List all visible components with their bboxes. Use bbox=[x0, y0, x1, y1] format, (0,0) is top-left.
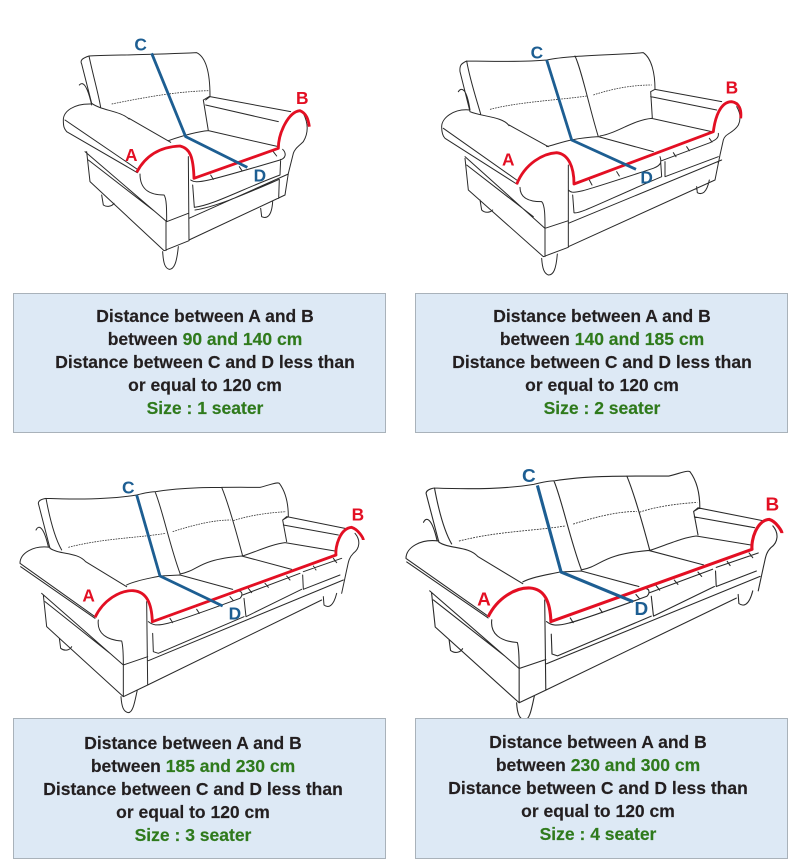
text box: 1 seater: between 90 and 140 cm bbox=[108, 329, 302, 349]
A-B measure line bbox=[517, 102, 741, 184]
labels A B C D: C bbox=[134, 35, 147, 55]
text box: 4 seater: Size : 4 seater bbox=[540, 824, 656, 844]
text box: 3 seater: or equal to 120 cm bbox=[116, 802, 270, 822]
text box: 3 seater: Size : 3 seater bbox=[135, 825, 251, 845]
sofa: 4 seater bbox=[406, 465, 782, 720]
text box: 1 seater: Size : 1 seater bbox=[147, 398, 263, 418]
text box: 4 seater: between 230 and 300 cm bbox=[496, 755, 700, 775]
text box: 2 seater: Size : 2 seater bbox=[544, 398, 660, 418]
text box: 2 seater: between 140 and 185 cm bbox=[500, 329, 704, 349]
text box: 4 seater: or equal to 120 cm bbox=[521, 801, 675, 821]
labels A B C D: B bbox=[296, 88, 309, 108]
sofa: 3 seater bbox=[20, 477, 364, 713]
text box: 4 seater: Distance between A and B bbox=[489, 732, 707, 752]
labels A B C D: D bbox=[254, 166, 266, 186]
sofa: 1 seater bbox=[63, 35, 309, 269]
labels A B C D: C bbox=[531, 43, 544, 63]
labels A B C D bbox=[477, 465, 779, 619]
labels A B C D bbox=[502, 43, 738, 187]
labels A B C D bbox=[82, 477, 364, 624]
text box: 2 seater: Distance between C and D less than bbox=[452, 352, 752, 372]
text box: 1 seater bbox=[13, 293, 386, 433]
labels A B C D: B bbox=[766, 494, 779, 515]
C-D measure line bbox=[152, 53, 247, 167]
labels A B C D: B bbox=[352, 505, 364, 525]
text box: 1 seater: Distance between C and D less than bbox=[55, 352, 355, 372]
labels A B C D: A bbox=[82, 585, 95, 605]
labels A B C D: C bbox=[522, 465, 536, 486]
text box: 4 seater bbox=[415, 718, 788, 859]
labels A B C D: A bbox=[502, 150, 515, 170]
C-D measure line bbox=[537, 485, 633, 602]
text box: 2 seater: or equal to 120 cm bbox=[525, 375, 679, 395]
text box: 3 seater: Distance between C and D less than bbox=[43, 779, 343, 799]
text box: 3 seater bbox=[13, 718, 386, 859]
text box: 3 seater: Distance between A and B bbox=[84, 733, 302, 753]
labels A B C D: A bbox=[125, 145, 138, 165]
C-D measure line bbox=[137, 495, 223, 606]
C-D measure line bbox=[547, 60, 636, 169]
sofa: 2 seater bbox=[442, 43, 741, 275]
labels A B C D: A bbox=[477, 588, 491, 609]
labels A B C D: B bbox=[726, 77, 738, 97]
A-B measure line bbox=[488, 519, 782, 622]
labels A B C D: D bbox=[229, 604, 241, 624]
text box: 2 seater bbox=[415, 293, 788, 433]
labels A B C D: D bbox=[640, 167, 653, 187]
text box: 2 seater: Distance between A and B bbox=[493, 306, 711, 326]
A-B measure line bbox=[137, 111, 309, 178]
labels A B C D: D bbox=[634, 598, 648, 619]
labels A B C D bbox=[125, 35, 309, 186]
text box: 1 seater: or equal to 120 cm bbox=[128, 375, 282, 395]
text box: 4 seater: Distance between C and D less than bbox=[448, 778, 748, 798]
text box: 3 seater: between 185 and 230 cm bbox=[91, 756, 295, 776]
A-B measure line bbox=[95, 527, 363, 622]
labels A B C D: C bbox=[122, 477, 135, 497]
text box: 1 seater: Distance between A and B bbox=[96, 306, 314, 326]
